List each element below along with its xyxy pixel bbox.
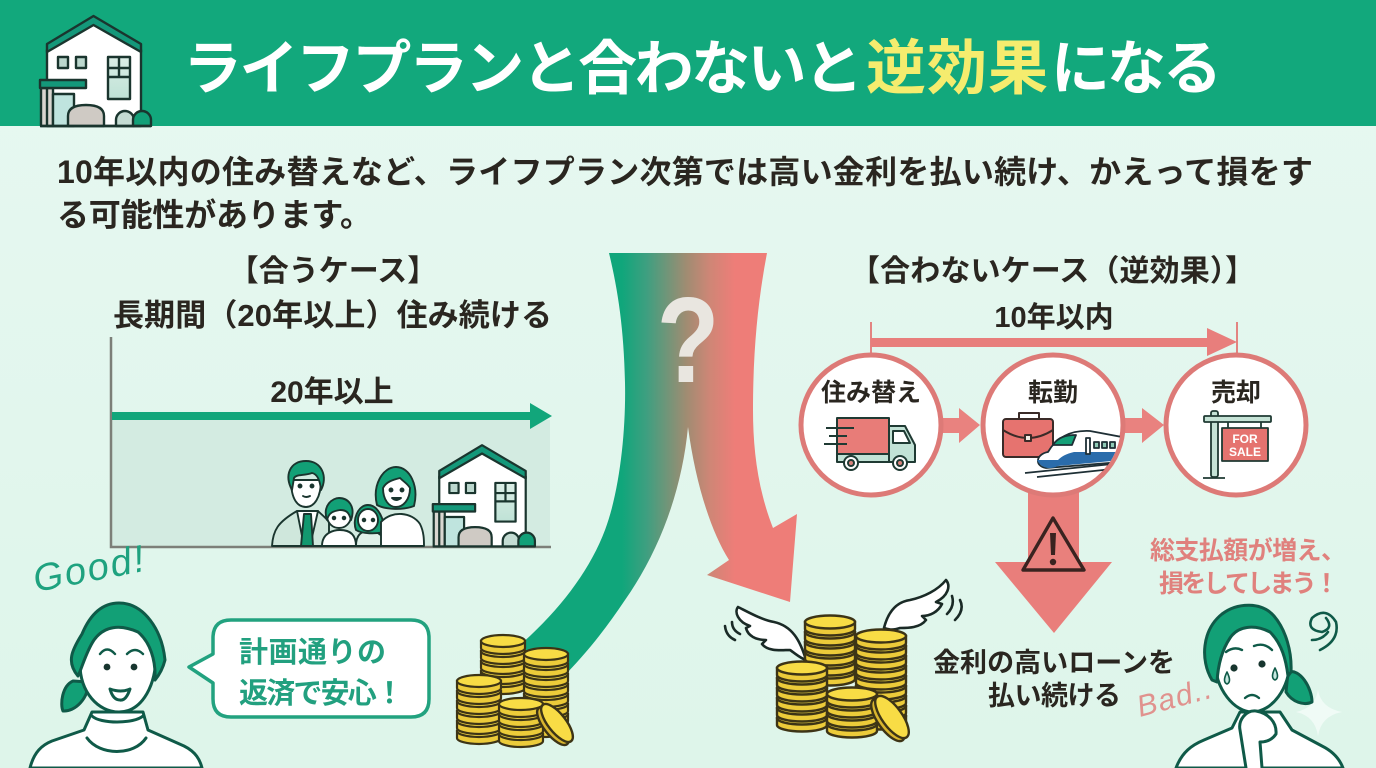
icon: truck xyxy=(824,418,915,470)
heading: matching case: 長期間（20年以上）住み続ける xyxy=(113,298,552,333)
intro text: る可能性があります。 xyxy=(57,197,372,233)
title: 逆効果 xyxy=(866,35,1048,102)
icon: house xyxy=(40,16,151,126)
callout: relief: 返済で安心！ xyxy=(239,677,404,710)
text: keep paying high rate loan: 払い続ける xyxy=(988,681,1121,711)
icon: for sale sign: SALE xyxy=(1229,445,1261,459)
icon: house with family xyxy=(433,445,535,546)
step: moving house: 住み替え xyxy=(821,379,921,407)
callout text: total payment rises: 損をしてしまう！ xyxy=(1159,570,1339,598)
icon: question mark: ? xyxy=(657,272,719,408)
step: job transfer xyxy=(983,355,1123,495)
step: job transfer: 転勤 xyxy=(1028,379,1078,407)
heading: matching case: 【合うケース】 xyxy=(229,255,437,288)
arrow: 10 years: 10年以内 xyxy=(994,301,1114,334)
text: keep paying high rate loan: 金利の高いローンを xyxy=(933,648,1175,678)
icon: for sale sign: FOR xyxy=(1232,432,1258,446)
arrows between circles xyxy=(940,408,1164,443)
label: 20 years: 20年以上 xyxy=(270,376,394,409)
heading: non-matching case: 【合わないケース（逆効果）】 xyxy=(850,255,1255,288)
title: ライフプランと合わないと xyxy=(183,36,863,102)
panel: matching case xyxy=(111,255,552,547)
arrow: forked path xyxy=(520,253,797,680)
icon: warning xyxy=(1023,518,1084,570)
arrow: down to high rate loan xyxy=(995,490,1112,633)
arrow: 10 years xyxy=(871,301,1237,356)
text: keep paying high rate loan xyxy=(933,648,1175,711)
icon: coin pile xyxy=(457,635,578,750)
step: moving house xyxy=(801,355,941,495)
icon: family xyxy=(272,461,424,546)
timeline chart xyxy=(111,337,552,547)
icon: briefcase xyxy=(1003,413,1053,457)
callout text: total payment rises xyxy=(1150,536,1346,598)
icon: sparkle xyxy=(1296,690,1342,736)
label: Bad..: Bad.. xyxy=(1133,672,1215,724)
step: sale xyxy=(1166,355,1306,495)
icon: coins with wings xyxy=(725,580,962,746)
icon: bullet train xyxy=(1025,431,1122,477)
panel: non-matching case xyxy=(801,255,1306,711)
label: Good!: Good! xyxy=(30,538,148,601)
header band xyxy=(0,0,1376,126)
intro text xyxy=(57,154,1313,233)
callout: relief xyxy=(189,620,429,717)
icon: for sale sign xyxy=(1203,411,1271,478)
arrow: 20 years xyxy=(112,403,552,429)
title xyxy=(183,35,1222,102)
callout: relief: 計画通りの xyxy=(239,636,386,669)
heading: matching case xyxy=(113,255,552,333)
title: になる xyxy=(1051,36,1222,102)
woman: happy xyxy=(30,603,202,768)
callout text: total payment rises: 総支払額が増え、 xyxy=(1150,536,1346,565)
step: sale: 売却 xyxy=(1211,379,1261,407)
woman: worried xyxy=(1176,605,1343,768)
intro text: 10年以内の住み替えなど、ライフプラン次第では高い金利を払い続け、かえって損をす xyxy=(57,154,1313,190)
